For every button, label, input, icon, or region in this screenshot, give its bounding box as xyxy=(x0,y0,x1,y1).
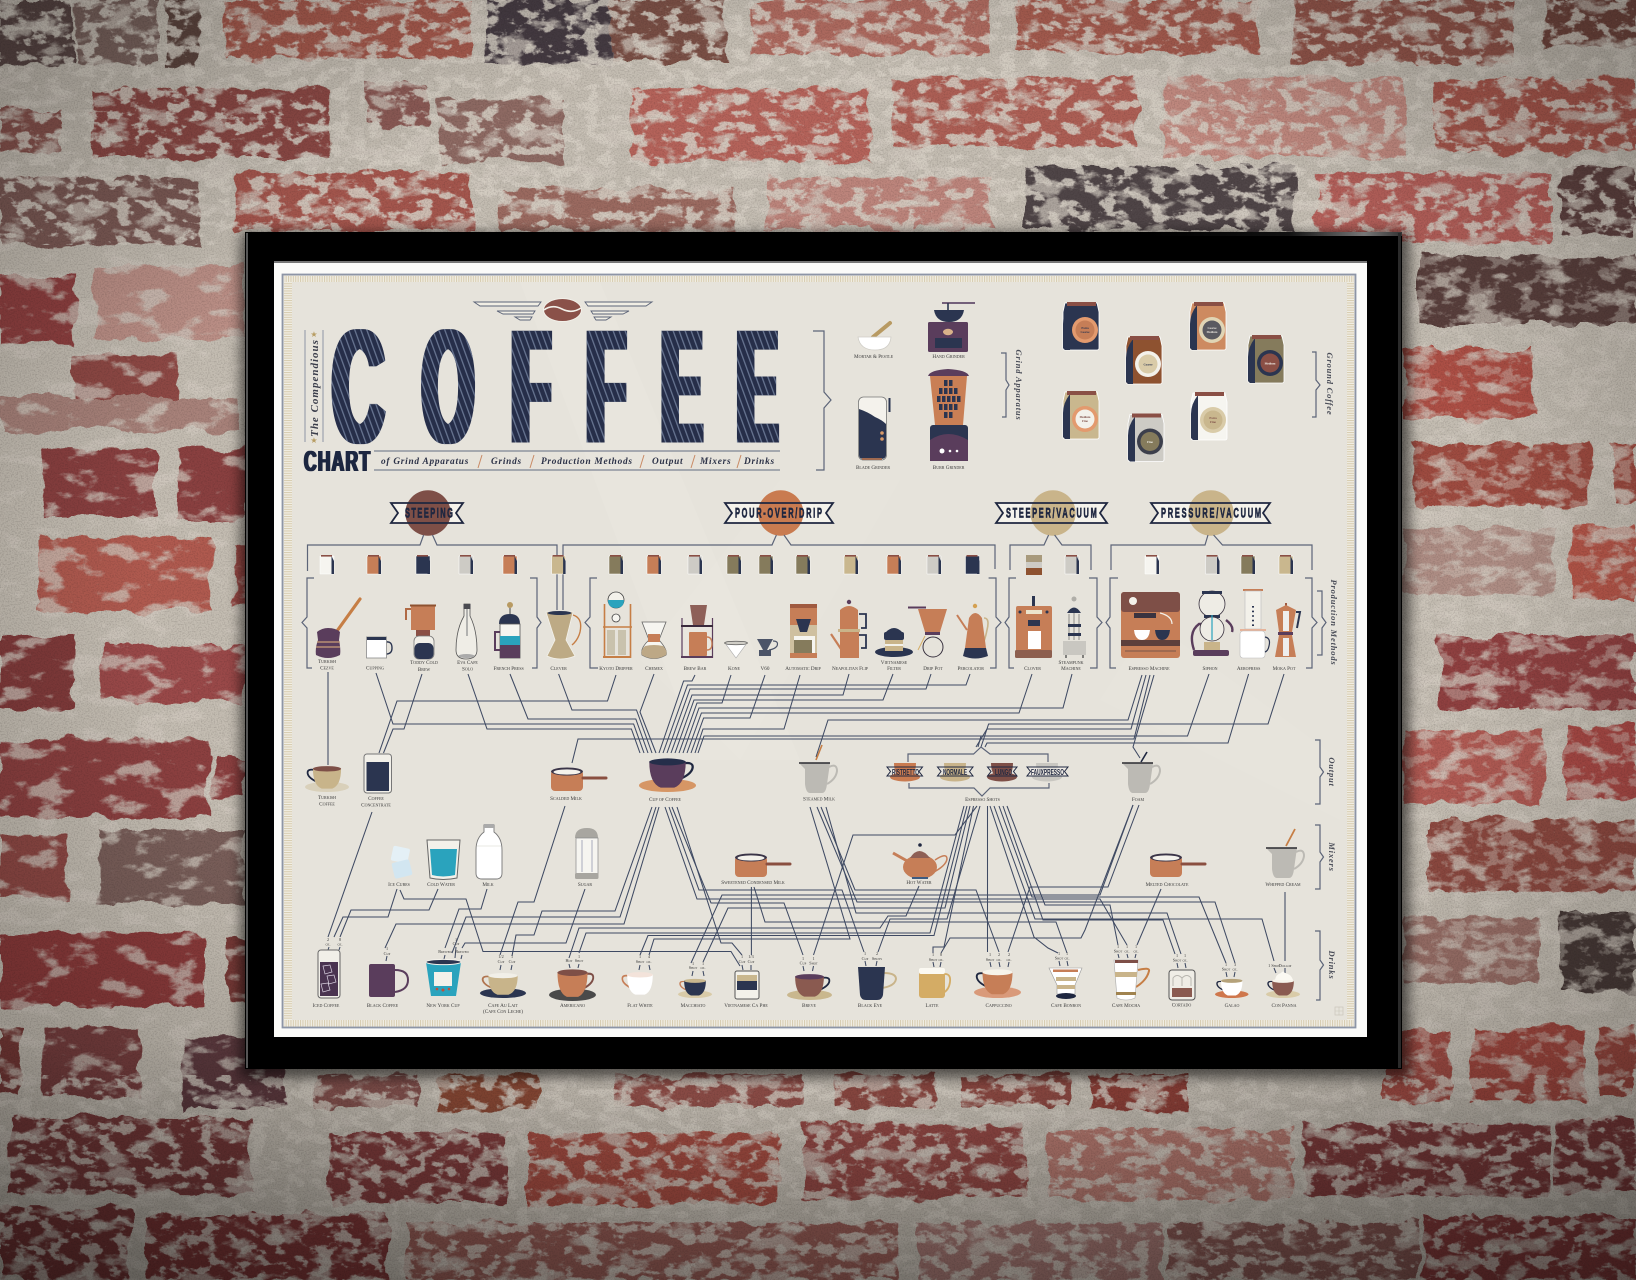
title: COFFEE: O xyxy=(422,297,474,477)
drink: cafe au lait xyxy=(480,954,526,1015)
mixer: sugar: Sugar xyxy=(578,882,592,888)
drink: Vietnamese ca phe: 1/3 xyxy=(748,954,754,959)
icon: Eva Cafe Solo: Solo xyxy=(462,666,473,672)
drink: New York cup xyxy=(426,937,470,1009)
category: Steeping: STEEPING xyxy=(405,507,453,521)
bracket and heading: Mixers: Mixers xyxy=(1327,841,1337,872)
drink: iced coffee: oz. xyxy=(337,942,343,946)
icon: percolator: Percolator xyxy=(958,666,984,672)
drink: con panna: 1 Shot xyxy=(1268,963,1280,968)
mixer: ice cubes: Ice Cubes xyxy=(388,882,410,888)
bag: coarse xyxy=(1126,336,1162,384)
category: Pressure / Vacuum xyxy=(1111,490,1312,570)
bracket and heading: Production Methods xyxy=(1317,580,1339,665)
bracket and heading: Production Methods: Production Methods xyxy=(1329,580,1339,665)
icon: Steampunk machine xyxy=(1058,596,1086,672)
icon: Clover machine xyxy=(1015,596,1052,672)
output: Turkish coffee: Coffee xyxy=(319,802,335,808)
icon: cupping mug: Cupping xyxy=(366,666,384,672)
output: cup of coffee: Cup of Coffee xyxy=(649,797,682,803)
drink: cafe au lait: Cup xyxy=(509,959,516,964)
icon: Neapolitan flip pot xyxy=(831,600,869,672)
title: The Compendious side text: ★ xyxy=(310,330,318,339)
subtitle strip: Production Methods xyxy=(541,457,633,467)
drink: flat white: oz. xyxy=(646,959,652,964)
bag: extra fine: Fine xyxy=(1210,420,1216,424)
drink: cortado: Shot xyxy=(1173,958,1181,962)
subtitle strip: Grinds xyxy=(491,457,522,467)
icon: Kyoto dripper: Kyoto Dripper xyxy=(599,666,633,672)
shot: normale xyxy=(938,763,973,782)
drink: breve: 1 xyxy=(802,956,804,961)
icon: burr grinder: Burr Grinder xyxy=(933,465,965,471)
drink: cafe mocha: Cafe Mocha xyxy=(1112,1003,1140,1009)
subtitle strip: Drinks xyxy=(743,457,775,467)
title: The Compendious side text xyxy=(305,330,323,445)
icon: Turkish cezve: Turkish xyxy=(318,659,336,665)
drink: breve: Shot xyxy=(809,960,818,966)
mixer: cold water: Cold Water xyxy=(427,882,455,888)
output: steamed milk xyxy=(799,745,837,802)
poster paper xyxy=(282,274,1356,1028)
drink: iced coffee: Iced Coffee xyxy=(313,1003,340,1009)
drink: black coffee: 1 xyxy=(386,946,388,951)
drink: cafe au lait: Cafe Au Lait xyxy=(488,1003,518,1009)
bag: coarse-medium xyxy=(1190,302,1226,350)
bag: extra coarse: Extra xyxy=(1081,326,1089,330)
output: cup of coffee xyxy=(639,758,696,803)
drink: Vietnamese ca phe: 1 xyxy=(741,954,743,959)
icon: Kone filter: Kone xyxy=(728,666,741,672)
drink: flat white xyxy=(620,954,660,1009)
drink: latte: 1 xyxy=(932,952,934,957)
drink: galao: 3 xyxy=(1234,962,1236,967)
bracket and heading: Ground Coffee: Ground Coffee xyxy=(1325,353,1335,415)
bag: extra fine: Extra xyxy=(1209,416,1217,420)
icon: Clever dripper: Clever xyxy=(550,666,567,672)
drink: flat white: 1 xyxy=(639,954,641,959)
bag: fine: Fine xyxy=(1147,440,1153,444)
bag: coarse: Coarse xyxy=(1144,362,1153,366)
icon: Eva Cafe Solo xyxy=(456,604,478,672)
shot: lungo: LUNGO xyxy=(995,768,1012,777)
mixer: melted chocolate: Melted Chocolate xyxy=(1146,882,1189,888)
icon: espresso machine xyxy=(1121,592,1180,672)
subtitle strip xyxy=(374,451,780,470)
bracket and heading: Drinks xyxy=(1315,931,1337,1000)
drink: americano: 1 xyxy=(578,954,580,959)
drink: macchiato: oz. xyxy=(700,965,706,970)
title: COFFEE: F xyxy=(587,297,625,476)
drink: cappuccino: 1 xyxy=(989,952,991,957)
connector lines: output and mixers to drinks xyxy=(328,805,1285,977)
icon: Eva Cafe Solo: Eva Cafe xyxy=(457,660,478,666)
icon: French press: French Press xyxy=(494,666,524,672)
mixer: melted chocolate xyxy=(1146,854,1205,888)
icon: blade grinder xyxy=(856,397,890,471)
icon: Moka pot: Moka Pot xyxy=(1273,666,1296,672)
icon: Brew Bar xyxy=(681,605,713,672)
icon: French press xyxy=(494,602,524,672)
drink: galao: 1 xyxy=(1225,962,1227,967)
mixer: sweetened condensed milk xyxy=(721,854,790,886)
drink: cafe mocha: 1 xyxy=(1117,944,1119,949)
title: COFFEE: E xyxy=(738,296,777,477)
title: The Compendious side text: The Compendious xyxy=(309,339,321,437)
output: espresso shots xyxy=(887,747,1068,803)
icon: Moka pot xyxy=(1273,603,1300,672)
icon: Chemex xyxy=(641,622,667,672)
icon: V60 xyxy=(757,639,778,672)
drink: cortado: Cortado xyxy=(1172,1002,1191,1008)
drink: macchiato: 1 xyxy=(702,961,704,966)
bag: coarse-medium: Medium xyxy=(1207,330,1218,334)
icon: mortar and pestle: Mortar & Pestle xyxy=(854,354,894,360)
category: Pressure / Vacuum: PRESSURE/VACUUM xyxy=(1161,507,1261,521)
drink: Vietnamese ca phe: Vietnamese Ca Phe xyxy=(724,1003,768,1009)
icon: Steampunk machine: Steampunk xyxy=(1058,660,1084,666)
drink: flat white: 4 xyxy=(648,954,651,959)
drink: cortado: 1 xyxy=(1184,953,1186,958)
drink: cafe mocha: oz. xyxy=(1133,948,1139,954)
output: foam: Foam xyxy=(1132,797,1145,803)
mixer: ice cubes xyxy=(388,845,413,888)
drink: breve: Cup xyxy=(800,960,807,966)
category: Steeper / Vacuum xyxy=(996,490,1107,570)
drink: cafe mocha: oz. xyxy=(1124,948,1130,954)
icon: mortar and pestle xyxy=(854,323,894,360)
drink: macchiato: 1 xyxy=(692,961,694,966)
drink: black eye: Black Eye xyxy=(858,1003,883,1009)
drink: galao: Galao xyxy=(1225,1003,1240,1009)
drink: americano: Hot xyxy=(565,958,573,963)
output: foam xyxy=(1122,752,1160,803)
icon: blade grinder: Blade Grinder xyxy=(856,465,890,471)
drink: cortado: 1 xyxy=(1176,953,1178,958)
bag: medium xyxy=(1248,335,1284,383)
drink: latte xyxy=(919,952,950,1009)
drink: latte: Latte xyxy=(926,1003,939,1009)
drink: cappuccino: 2 xyxy=(1008,952,1010,957)
icon: percolator xyxy=(957,604,988,672)
drink: breve: 1 xyxy=(812,956,815,961)
drink: cappuccino: Cappuccino xyxy=(986,1003,1012,1009)
icon: Steampunk machine: Machine xyxy=(1061,666,1081,672)
bracket and heading: Grind Apparatus xyxy=(1001,350,1024,420)
icon: Clover machine: Clover xyxy=(1024,666,1041,672)
icon: Neapolitan flip pot: Neapolitan Flip xyxy=(832,666,869,672)
drink: iced coffee: 2 xyxy=(327,937,329,942)
mixer: sugar xyxy=(575,828,598,888)
drink: Vietnamese ca phe: Cup xyxy=(739,959,746,964)
drink: New York cup: New York Cup xyxy=(426,1003,460,1009)
output: scalded milk: Scalded Milk xyxy=(550,796,582,802)
drink: cafe bonbon: 1 xyxy=(1066,951,1068,956)
category: Steeper / Vacuum: STEEPER/VACUUM xyxy=(1006,507,1097,521)
drink: cafe bonbon: oz. xyxy=(1064,956,1070,960)
title: COFFEE: E xyxy=(662,296,701,477)
drink: iced coffee xyxy=(313,937,343,1009)
drink: cafe mocha xyxy=(1112,944,1149,1009)
icon: drip pot xyxy=(908,608,947,672)
bracket: title to apparatus xyxy=(813,331,831,470)
drink: breve: Breve xyxy=(802,1003,817,1009)
bag: medium: Medium xyxy=(1265,362,1276,366)
output: Turkish coffee: Turkish xyxy=(318,795,336,801)
icon: Turkish cezve: Cezve xyxy=(320,666,334,672)
icon: Vietnamese filter: Vietnamese xyxy=(881,660,908,666)
bag: coarse-medium: Coarse xyxy=(1208,326,1217,330)
drink: cafe au lait: Cup xyxy=(498,959,505,964)
drink: flat white: Shot xyxy=(636,959,644,964)
drink: cappuccino: oz. xyxy=(996,957,1002,962)
icon: Aeropress xyxy=(1237,589,1270,672)
drink: black coffee: Cup xyxy=(384,951,391,956)
drink: latte: oz. xyxy=(938,957,944,962)
group brackets around production methods xyxy=(302,578,1317,668)
drink: cafe bonbon: Shot xyxy=(1055,956,1063,960)
icon: siphon xyxy=(1192,591,1232,672)
output: espresso shots: Espresso Shots xyxy=(965,797,1000,803)
drink: cafe mocha: Shot xyxy=(1114,948,1122,954)
drink: cafe au lait: (Cafe Con Leche) xyxy=(483,1008,523,1015)
drink: cappuccino: 2 xyxy=(998,952,1000,957)
bracket and heading: Grind Apparatus: Grind Apparatus xyxy=(1014,350,1024,420)
bracket and heading: Ground Coffee xyxy=(1312,352,1335,417)
bag: extra fine xyxy=(1191,392,1227,440)
title: CHART: CHART xyxy=(304,446,370,478)
mixer: hot water teapot xyxy=(893,843,947,886)
drink: cafe bonbon: 1 xyxy=(1058,951,1060,956)
drink: latte: Shot xyxy=(929,957,937,962)
icon: cupping mug xyxy=(366,637,392,672)
shot: ristretto: RISTRETTO xyxy=(892,768,919,777)
drink: cortado: oz. xyxy=(1182,958,1188,962)
mixer: cold water xyxy=(427,840,460,888)
title: The Compendious side text: ★ xyxy=(310,436,318,445)
framed poster xyxy=(240,232,1410,1078)
icon: Vietnamese filter xyxy=(875,628,913,672)
category: Steeping xyxy=(308,490,557,610)
drink: cafe mocha: 1 xyxy=(1126,944,1128,949)
drink: con panna: Dollop xyxy=(1279,963,1292,968)
bag: medium-fine: Fine xyxy=(1082,419,1088,423)
icon: Chemex: Chemex xyxy=(645,666,663,672)
drink: macchiato: Macchiato xyxy=(681,1003,705,1009)
drink: macchiato xyxy=(678,961,712,1009)
bracket and heading: Drinks: Drinks xyxy=(1327,950,1337,979)
drink: black eye xyxy=(858,951,896,1009)
connector lines: production methods to output xyxy=(328,672,1284,765)
icon: Brew Bar: Brew Bar xyxy=(684,666,707,672)
bracket and heading: Output: Output xyxy=(1327,757,1337,787)
drink: black eye: 2 xyxy=(876,951,878,956)
drink: iced coffee: oz. xyxy=(325,942,331,946)
drink: cafe au lait: 1 xyxy=(511,954,513,959)
icon: hand grinder xyxy=(928,303,975,360)
output: coffee concentrate: Coffee xyxy=(368,796,384,802)
icon: burr grinder xyxy=(928,369,969,471)
drink: cafe bonbon: Cafe Bonbon xyxy=(1051,1003,1081,1009)
mixer: milk: Milk xyxy=(482,882,494,888)
drink: New York cup: Cup xyxy=(453,941,460,946)
drink: con panna xyxy=(1266,963,1300,1009)
picture frame xyxy=(245,232,1402,1069)
bag: fine xyxy=(1128,414,1164,462)
shot: ristretto xyxy=(887,763,922,782)
icon: Toddy cold brew: Brew xyxy=(418,667,430,673)
drink: cortado xyxy=(1169,953,1195,1008)
drink: cafe au lait: 1/2 xyxy=(498,954,504,959)
output: Turkish coffee xyxy=(305,766,349,808)
drink: cappuccino xyxy=(974,952,1021,1009)
icon: Toddy cold brew: Toddy Cold xyxy=(410,660,438,666)
output: coffee concentrate: Concentrate xyxy=(361,802,391,808)
icon: drip pot: Drip Pot xyxy=(923,666,943,672)
row of small grind bags xyxy=(320,555,1293,575)
category: Pour-over / Drip xyxy=(563,490,995,610)
icon: Aeropress: Aeropress xyxy=(1237,666,1260,672)
drink: galao: Shot xyxy=(1222,966,1230,972)
drink: black coffee xyxy=(367,946,408,1009)
bag: medium-fine xyxy=(1063,391,1099,439)
mixer: sweetened condensed milk: Sweetened Condensed Milk xyxy=(721,880,785,886)
drink: New York cup: Brewed xyxy=(438,949,453,954)
white mat xyxy=(274,262,1367,1037)
icon: Turkish cezve xyxy=(316,599,360,672)
drink: latte: 8 xyxy=(940,952,942,957)
icon: V60: V60 xyxy=(761,666,770,672)
title: COFFEE: C xyxy=(332,298,384,477)
icon: automatic drip machine: Automatic Drip xyxy=(785,666,822,672)
icon: Clever dripper xyxy=(546,611,581,672)
title: wings and coffee bean emblem xyxy=(474,298,652,322)
mixer: hot water teapot: Hot Water xyxy=(906,880,932,886)
shot: lungo xyxy=(987,763,1017,782)
drink: New York cup: Brewed xyxy=(455,949,470,954)
drink: black eye: Cup xyxy=(862,956,869,961)
icon: Kone filter xyxy=(724,641,748,672)
icon: siphon: Siphon xyxy=(1202,666,1218,672)
shot: fauxpresso: FAUXPRESSO xyxy=(1031,768,1064,777)
output: scalded milk xyxy=(550,768,606,802)
title: COFFEE: F xyxy=(512,297,550,476)
bag: extra coarse: Coarse xyxy=(1080,330,1090,334)
subtitle strip: Mixers xyxy=(699,457,731,467)
category: Pour-over / Drip: POUR-OVER/DRIP xyxy=(735,507,822,521)
drink: black eye: 1 xyxy=(864,951,866,956)
drink: Vietnamese ca phe xyxy=(724,954,768,1009)
icon: hand grinder: Hand Grinder xyxy=(932,354,965,360)
drink: galao: oz. xyxy=(1232,966,1238,972)
subtitle strip: Output xyxy=(652,457,683,467)
drink: americano: Americano xyxy=(560,1003,585,1009)
bag: extra coarse xyxy=(1063,302,1099,350)
shot: fauxpresso xyxy=(1027,763,1068,782)
drink: cappuccino: Shot xyxy=(986,957,994,962)
drink: New York cup: 1 xyxy=(455,937,457,942)
drink: iced coffee: 8 xyxy=(339,937,341,942)
shot: normale: NORMALE xyxy=(943,768,967,777)
icon: espresso machine: Espresso Machine xyxy=(1128,666,1170,672)
icon: Kyoto dripper xyxy=(599,592,633,672)
drink: con panna: Con Panna xyxy=(1272,1003,1297,1009)
icon: Toddy cold brew xyxy=(406,604,438,673)
drink: americano: Shot xyxy=(575,958,583,963)
bracket and heading: Mixers xyxy=(1315,825,1337,889)
drink: black coffee: Black Coffee xyxy=(367,1003,399,1009)
drink: Vietnamese ca phe: Cup xyxy=(748,959,755,964)
drink: black eye: Shots xyxy=(872,956,882,961)
drink: galao xyxy=(1215,962,1248,1009)
mixer: whipped cream xyxy=(1265,829,1304,888)
drink: americano xyxy=(549,954,596,1009)
drink: breve xyxy=(787,956,832,1009)
output: steamed milk: Steamed Milk xyxy=(803,796,835,802)
drink: macchiato: Shot xyxy=(689,965,697,970)
icon: Vietnamese filter: Filter xyxy=(887,666,901,672)
mixer: milk xyxy=(476,824,502,888)
bracket and heading: Output xyxy=(1315,740,1337,804)
drink: cappuccino: oz. xyxy=(1006,957,1012,962)
bag: medium-fine: Medium xyxy=(1080,415,1091,419)
drink: cafe bonbon xyxy=(1049,951,1082,1009)
output: coffee concentrate xyxy=(361,754,392,808)
drink: flat white: Flat White xyxy=(627,1003,653,1009)
publisher mark xyxy=(1335,1007,1343,1015)
icon: automatic drip machine xyxy=(785,604,822,672)
drink: cafe mocha: 1 xyxy=(1135,944,1137,949)
title: COFFEE xyxy=(326,296,786,477)
ground coffee bags xyxy=(1063,302,1284,462)
mixer: whipped cream: Whipped Cream xyxy=(1265,882,1301,888)
subtitle strip: of Grind Apparatus xyxy=(381,457,469,467)
